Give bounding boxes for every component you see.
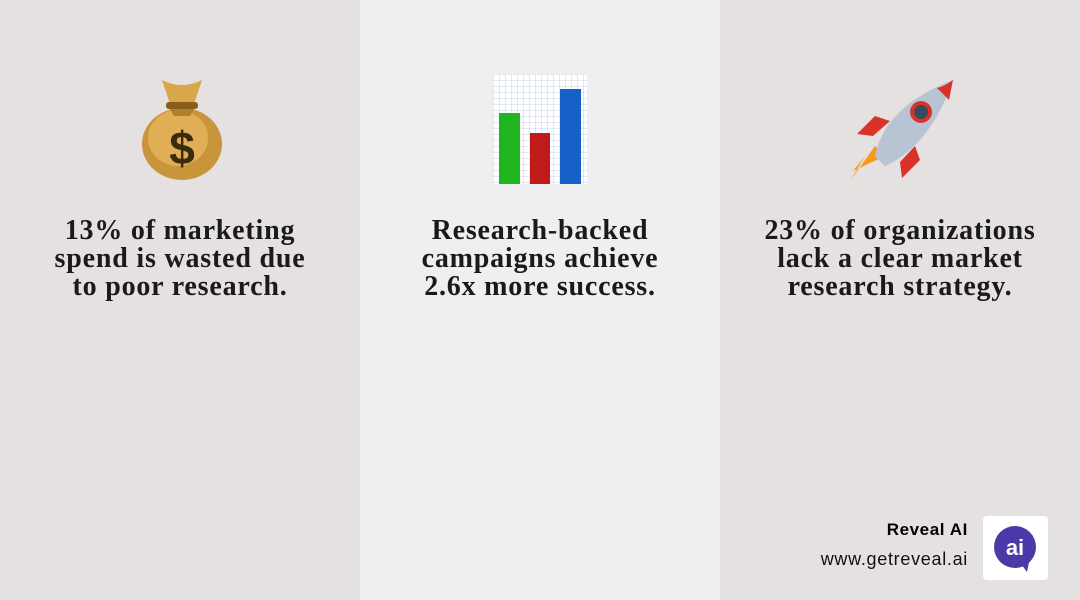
- logo: [983, 516, 1048, 580]
- text: stat 1: spend is wasted due: [55, 243, 305, 274]
- text: stat 1: [55, 215, 305, 302]
- text: stat 2: 2.6x more success.: [424, 271, 656, 302]
- text: stat 1: to poor research.: [72, 271, 288, 302]
- text: stat 2: campaigns achieve: [422, 243, 658, 274]
- text: stat 2: Research-backed: [432, 215, 648, 246]
- text: stat 3: 23% of organizations: [764, 215, 1036, 246]
- panel: right: [720, 0, 1080, 600]
- text: stat 3: [764, 215, 1036, 302]
- website: www.getreveal.ai: [821, 549, 968, 569]
- text: stat 2: [422, 215, 658, 302]
- text: stat 3: research strategy.: [788, 271, 1012, 302]
- icon: money bag: $: [169, 122, 195, 174]
- brand name: Reveal AI: [887, 520, 968, 539]
- logo: ai: [1006, 535, 1024, 560]
- panel: left: [0, 0, 360, 600]
- icon: bar chart: [493, 74, 587, 184]
- brand block: [820, 516, 1048, 580]
- text: stat 1: 13% of marketing: [65, 215, 295, 246]
- icon: money bag: [142, 80, 222, 180]
- panel: middle: [360, 0, 720, 600]
- icon: rocket: [850, 80, 953, 181]
- text: stat 3: lack a clear market: [777, 243, 1023, 274]
